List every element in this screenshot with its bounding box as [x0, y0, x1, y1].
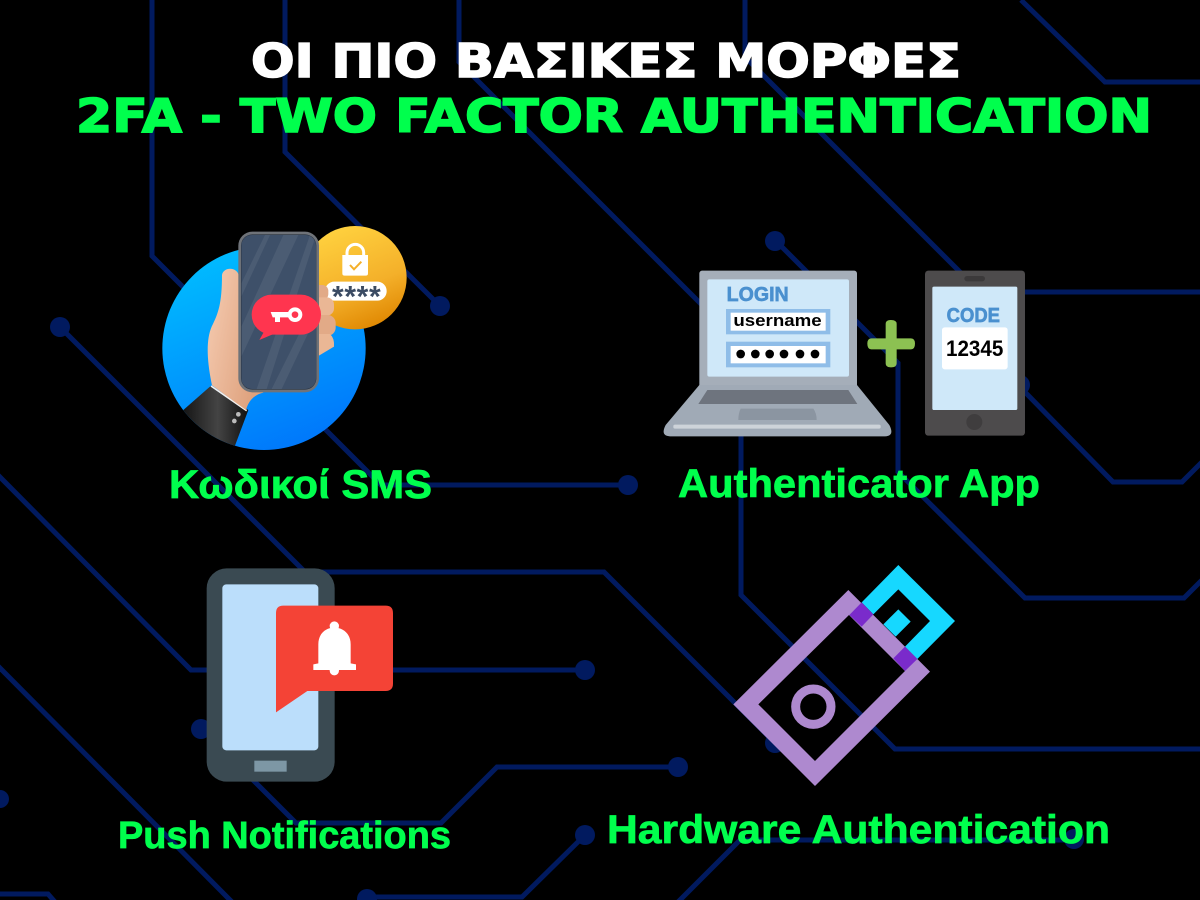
- title line 2: 2FA - TWO FACTOR AUTHENTICATION: [76, 89, 1152, 143]
- laptop: LOGIN: [727, 283, 789, 306]
- title line 1: ΟΙ ΠΙΟ ΒΑΣΙΚΕΣ ΜΟΡΦΕΣ: [251, 34, 961, 88]
- phone with code: 12345: [946, 336, 1003, 361]
- title: [76, 34, 1152, 143]
- laptop: username: [733, 311, 822, 330]
- label: SMS codes: Κωδικοί SMS: [169, 463, 432, 507]
- laptop: [664, 271, 891, 436]
- phone with code: CODE: [947, 304, 1000, 327]
- icon: SMS codes phone in hand: [162, 226, 407, 450]
- label: Hardware Authentication: Hardware Authentication: [607, 808, 1110, 852]
- icon: hardware USB key: [733, 565, 955, 786]
- phone with code: [925, 271, 1025, 436]
- plus sign: [867, 320, 915, 367]
- label: Authenticator App: Authenticator App: [678, 462, 1040, 506]
- icon: SMS codes phone in hand: ****: [332, 280, 381, 313]
- icon: laptop login plus phone code: [664, 271, 1025, 436]
- label: Push Notifications: Push Notifications: [118, 815, 451, 857]
- icon: push notification phone: [207, 568, 393, 782]
